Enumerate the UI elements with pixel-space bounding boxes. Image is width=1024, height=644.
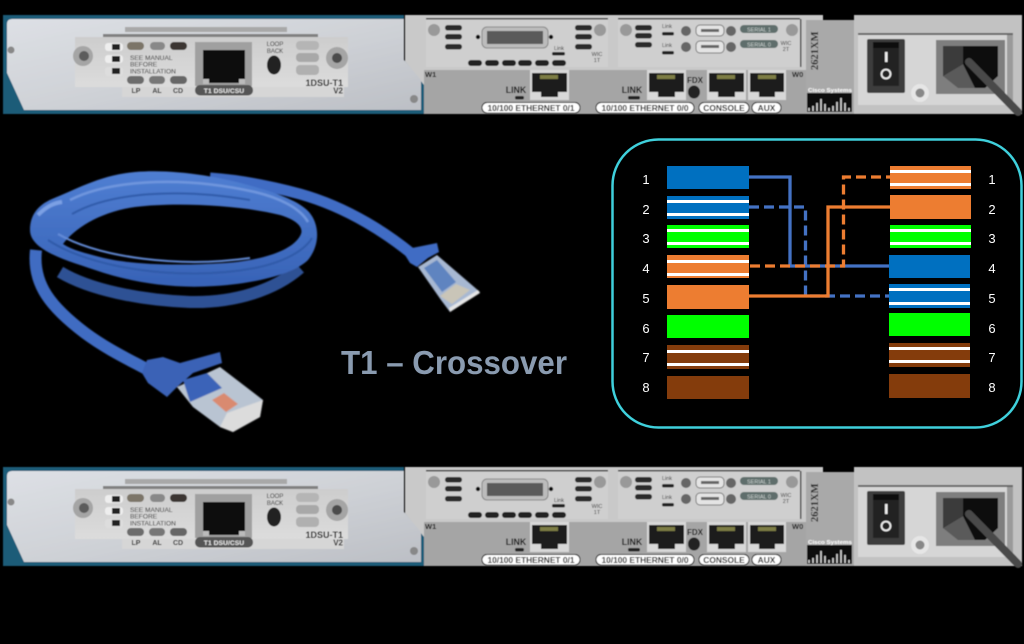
WIC 2T card: SERIAL 1 bbox=[747, 28, 771, 34]
ethernet and console ports: W0 bbox=[792, 70, 803, 79]
orange solid wire: pin 5 to pin 2 bbox=[749, 207, 890, 296]
WIC 2T card: Link bbox=[662, 495, 672, 501]
WIC 2T card: Link bbox=[662, 476, 672, 482]
WIC 1T card: 1T bbox=[594, 58, 601, 64]
WIC 2T card bbox=[618, 470, 802, 519]
router panel: top bbox=[3, 15, 1022, 114]
WIC 1T card: 1T bbox=[594, 510, 601, 516]
left pin numbers bbox=[642, 172, 650, 395]
ethernet and console ports: LINK bbox=[622, 537, 643, 547]
router chassis bbox=[405, 15, 823, 114]
T1 module plate bbox=[7, 19, 421, 110]
power section bbox=[854, 467, 1022, 566]
module face: AL bbox=[152, 540, 162, 547]
module face: BACK bbox=[267, 49, 283, 55]
WIC 1T card: Link bbox=[554, 498, 564, 504]
port labels: 10/100 ETHERNET 0/0 bbox=[601, 103, 689, 113]
coil strand highlights bbox=[38, 182, 312, 273]
port labels: AUX bbox=[758, 555, 776, 565]
WIC 2T card: WIC bbox=[781, 493, 791, 499]
module face: LOOP bbox=[267, 494, 283, 500]
right pin numbers bbox=[988, 172, 996, 395]
left pin numbers: 7 bbox=[642, 350, 650, 365]
power socket and cord bbox=[936, 40, 1018, 112]
ethernet and console ports bbox=[425, 522, 803, 552]
module face: AL bbox=[152, 88, 162, 95]
left pin numbers: 4 bbox=[642, 261, 650, 276]
module face: CD bbox=[173, 540, 183, 547]
module face: 1DSU-T1 bbox=[305, 78, 343, 88]
port labels: AUX bbox=[758, 103, 776, 113]
router chassis bbox=[405, 467, 823, 566]
module face bbox=[8, 27, 418, 103]
right pin numbers: 2 bbox=[988, 202, 996, 217]
model and logo panel: 2621XM bbox=[810, 31, 821, 70]
power switch bbox=[867, 39, 905, 93]
ethernet and console ports: W1 bbox=[425, 70, 436, 79]
module face: T1 DSU/CSU bbox=[204, 88, 244, 95]
module face: LP bbox=[132, 88, 141, 95]
ethernet and console ports: W0 bbox=[792, 522, 803, 531]
router panel: bottom bbox=[3, 467, 1022, 566]
model and logo panel: Cisco Systems bbox=[808, 88, 852, 94]
bottom plug bbox=[142, 352, 263, 432]
module face: SEE MANUAL bbox=[130, 507, 173, 514]
WIC 1T card: WIC bbox=[592, 52, 602, 58]
crossover wires bbox=[749, 177, 890, 296]
right pin numbers: 6 bbox=[988, 321, 996, 336]
cable back strand with print bbox=[60, 268, 300, 302]
WIC 1T card: WIC bbox=[592, 504, 602, 510]
WIC 1T card bbox=[426, 18, 608, 67]
WIC 2T card: 2T bbox=[783, 499, 790, 505]
module face: V2 bbox=[333, 538, 344, 548]
module face: V2 bbox=[333, 86, 344, 96]
T1 module backing bbox=[3, 15, 424, 114]
left wire colour bars bbox=[667, 166, 749, 399]
right pin numbers: 8 bbox=[988, 380, 996, 395]
cable upper run to connector bbox=[210, 178, 412, 254]
port labels: CONSOLE bbox=[703, 103, 745, 113]
WIC 2T card: WIC bbox=[781, 41, 791, 47]
port labels: 10/100 ETHERNET 0/0 bbox=[601, 555, 689, 565]
panel: pinout diagram bbox=[612, 140, 1022, 428]
ethernet and console ports: FDX bbox=[687, 528, 704, 537]
ethernet and console ports: LINK bbox=[622, 85, 643, 95]
panel frame bbox=[612, 140, 1022, 428]
WIC 2T card: Link bbox=[662, 24, 672, 30]
ethernet and console ports: LINK bbox=[506, 537, 527, 547]
WIC 2T card bbox=[618, 18, 802, 67]
blue solid wire: pin 1 to pin 4 bbox=[749, 177, 889, 266]
WIC 2T card: Link bbox=[662, 43, 672, 49]
WIC 2T card: 2T bbox=[783, 47, 790, 53]
model and logo panel bbox=[806, 20, 854, 114]
ethernet and console ports bbox=[425, 70, 803, 100]
module face: CD bbox=[173, 88, 183, 95]
module face bbox=[8, 479, 418, 555]
module face: BACK bbox=[267, 501, 283, 507]
T1 module backing bbox=[3, 467, 424, 566]
model and logo panel: 2621XM bbox=[810, 483, 821, 522]
power section bbox=[854, 15, 1022, 114]
port labels bbox=[482, 554, 781, 565]
left pin numbers: 1 bbox=[642, 172, 650, 187]
model and logo panel: Cisco Systems bbox=[808, 540, 852, 546]
left pin numbers: 3 bbox=[642, 231, 650, 246]
right wire colour bars bbox=[889, 166, 971, 398]
right pin numbers: 1 bbox=[988, 172, 996, 187]
port labels bbox=[482, 102, 781, 113]
module face: 1DSU-T1 bbox=[305, 530, 343, 540]
ethernet cable illustration bbox=[30, 171, 480, 432]
top-right plug bbox=[405, 243, 480, 312]
module face: LP bbox=[132, 540, 141, 547]
right pin numbers: 5 bbox=[988, 291, 996, 306]
power switch bbox=[867, 491, 905, 545]
left pin numbers: 2 bbox=[642, 202, 650, 217]
WIC 2T card: SERIAL 0 bbox=[747, 42, 771, 48]
module face: INSTALLATION bbox=[130, 68, 176, 76]
ethernet and console ports: W1 bbox=[425, 522, 436, 531]
left pin numbers: 6 bbox=[642, 321, 650, 336]
right pin numbers: 7 bbox=[988, 350, 996, 365]
T1 module plate bbox=[7, 471, 421, 562]
WIC 2T card: SERIAL 1 bbox=[747, 480, 771, 486]
model and logo panel bbox=[806, 472, 854, 566]
title: T1 – Crossover bbox=[341, 344, 567, 381]
WIC 1T card bbox=[426, 470, 608, 519]
ethernet and console ports: LINK bbox=[506, 85, 527, 95]
WIC 1T card: Link bbox=[554, 46, 564, 52]
module face: BEFORE bbox=[130, 62, 158, 68]
module face: LOOP bbox=[267, 42, 283, 48]
left pin numbers: 5 bbox=[642, 291, 650, 306]
module face: T1 DSU/CSU bbox=[204, 540, 244, 547]
blue dashed wire: pin 2 to pin 5 bbox=[749, 207, 889, 296]
ethernet and console ports: FDX bbox=[687, 76, 704, 85]
power socket and cord bbox=[936, 492, 1018, 564]
port labels: 10/100 ETHERNET 0/1 bbox=[487, 103, 575, 113]
module face: SEE MANUAL bbox=[130, 55, 173, 62]
cable lower strand bbox=[35, 250, 152, 372]
module face: BEFORE bbox=[130, 514, 158, 520]
left pin numbers: 8 bbox=[642, 380, 650, 395]
cable main coil bbox=[30, 171, 317, 287]
orange dashed wire: pin 4 to pin 1 bbox=[750, 177, 890, 266]
WIC 2T card: SERIAL 0 bbox=[747, 494, 771, 500]
right pin numbers: 4 bbox=[988, 261, 996, 276]
right pin numbers: 3 bbox=[988, 231, 996, 246]
port labels: CONSOLE bbox=[703, 555, 745, 565]
module face: INSTALLATION bbox=[130, 520, 176, 528]
port labels: 10/100 ETHERNET 0/1 bbox=[487, 555, 575, 565]
